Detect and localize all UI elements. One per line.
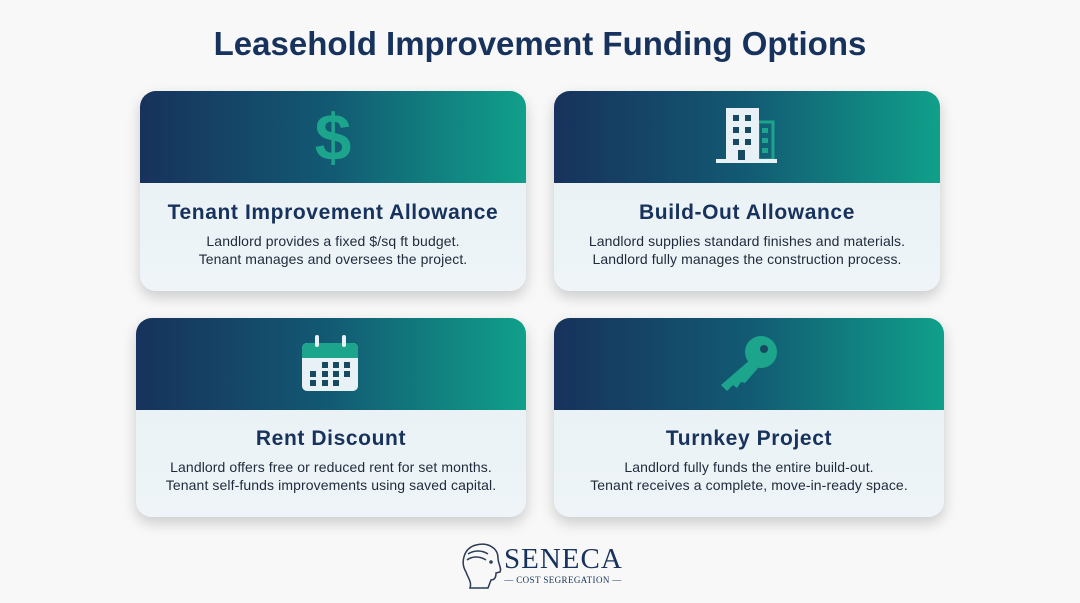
icon: head xyxy=(462,543,502,589)
text block xyxy=(199,233,467,267)
icon: calendar xyxy=(302,335,358,391)
tagline: — COST SEGREGATION — xyxy=(504,575,622,585)
text block xyxy=(590,459,908,493)
heading: Rent Discount xyxy=(256,427,406,450)
text block: Landlord fully funds the entire build-out. xyxy=(624,459,874,475)
heading: Turnkey Project xyxy=(666,427,832,450)
logo: seneca xyxy=(462,543,623,589)
heading: Build-Out Allowance xyxy=(639,201,855,224)
header band xyxy=(136,318,526,410)
text block: Landlord offers free or reduced rent for set months. xyxy=(170,459,492,475)
text block: Tenant receives a complete, move-in-ready space. xyxy=(590,477,908,493)
header band xyxy=(554,91,940,183)
panel: rent discount xyxy=(136,318,526,517)
icon: dollar: $ xyxy=(315,100,351,174)
header band xyxy=(554,318,944,410)
panel: tenant improvement allowance xyxy=(140,91,526,291)
icon: key xyxy=(721,336,777,391)
text block: Tenant self-funds improvements using saved capital. xyxy=(166,477,496,493)
text block: Landlord provides a fixed $/sq ft budget. xyxy=(206,233,460,249)
icon: building xyxy=(716,108,777,163)
text block xyxy=(589,233,905,267)
header band xyxy=(140,91,526,183)
text block: Tenant manages and oversees the project. xyxy=(199,251,467,267)
panel: build-out allowance xyxy=(554,91,940,291)
title: Leasehold Improvement Funding Options xyxy=(214,25,866,62)
text block xyxy=(166,459,496,493)
text block: Landlord supplies standard finishes and materials. xyxy=(589,233,905,249)
text block: Landlord fully manages the construction process. xyxy=(592,251,902,267)
heading: Tenant Improvement Allowance xyxy=(168,201,498,224)
panel: turnkey project xyxy=(554,318,944,517)
logo text: SENECA xyxy=(504,543,623,575)
